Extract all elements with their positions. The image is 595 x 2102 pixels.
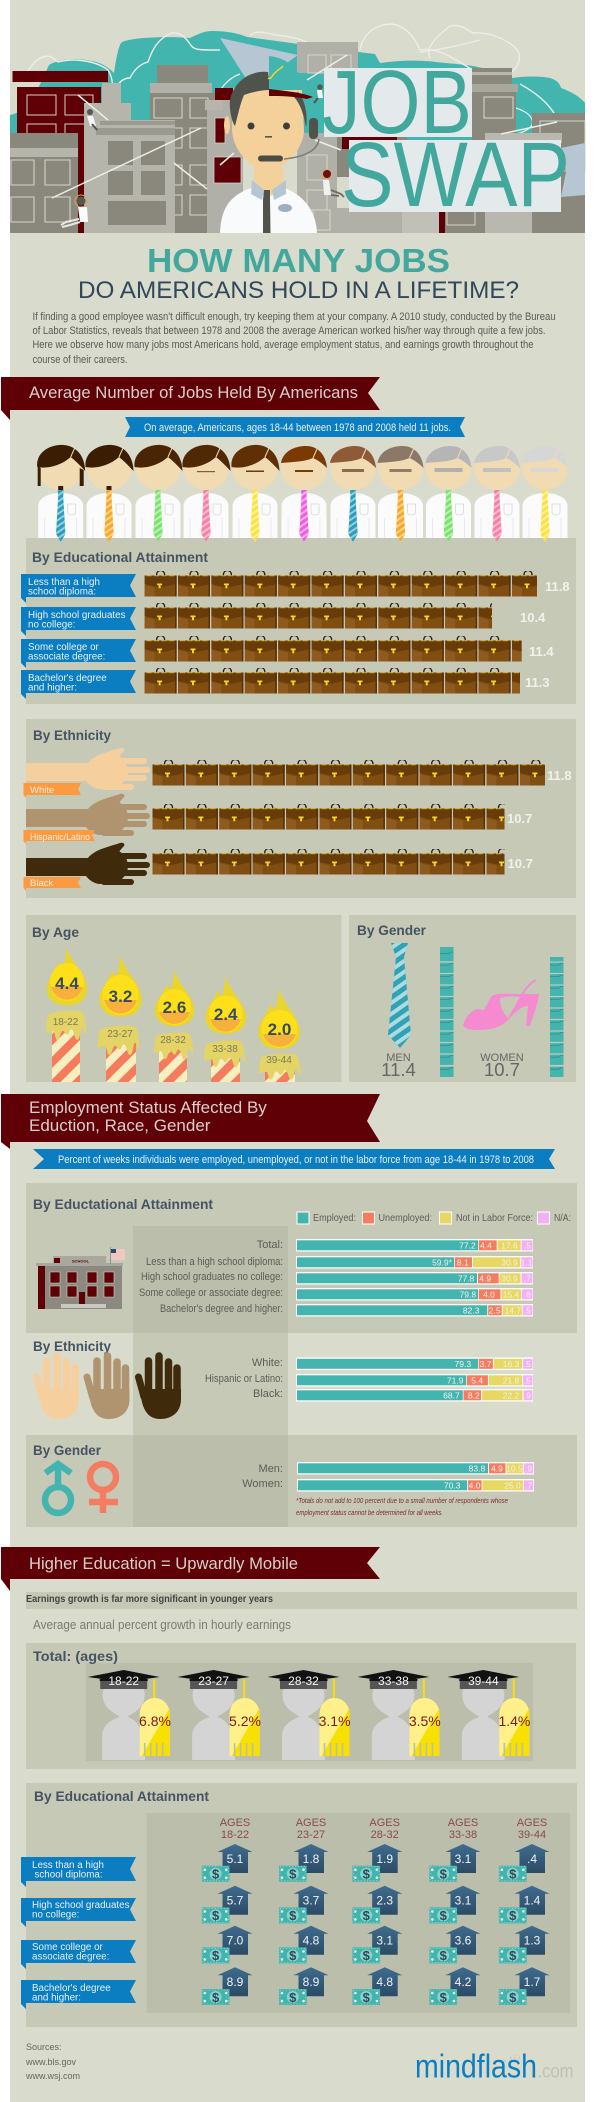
- graduate 39-44: 39-44: [468, 1674, 499, 1688]
- bar: women: 25.0: [504, 1480, 521, 1490]
- bar: total: 77.2: [459, 1240, 476, 1250]
- candle 28-32: 28-32: [160, 1035, 186, 1046]
- icon: raised black hand: [138, 1356, 181, 1419]
- bar: black: 68.7: [443, 1390, 460, 1400]
- panel: employment backgrounds: [26, 1183, 577, 1527]
- heading: By Educational Attainment: [32, 549, 208, 565]
- bars labels: ethnicity: Black:: [253, 1388, 283, 1400]
- earnings row: high school graduates: 1.4: [524, 1894, 541, 1908]
- bar: high school graduates: .7: [524, 1274, 531, 1284]
- bar: hispanic: .5: [524, 1376, 531, 1386]
- graduate 33-38: 3.5%: [409, 1713, 441, 1729]
- bar: women: 4.0: [469, 1480, 481, 1490]
- earnings row: less than high school: $: [509, 1866, 517, 1882]
- label: less than high school: Less than a high: [32, 1860, 104, 1871]
- earnings row: less than high school: [202, 1844, 550, 1882]
- graduate 33-38: 33-38: [378, 1674, 409, 1688]
- section banner: employment status: Eduction, Race, Gender: [29, 1116, 211, 1135]
- bars labels: education: High school graduates no college:: [141, 1271, 283, 1283]
- graduate 39-44: 1.4%: [498, 1713, 530, 1729]
- bar: total: .5: [524, 1240, 531, 1250]
- legend: Unemployed:: [378, 1212, 432, 1224]
- folders stack women: [550, 957, 564, 1077]
- subheading: Average annual percent growth in hourly earnings: [33, 1617, 291, 1632]
- footnote: *Totals do not add to 100 percent due to a small number of respondents whose: [296, 1498, 508, 1505]
- earnings row: bachelor's: $: [440, 1990, 448, 2005]
- bar: women: .7: [525, 1480, 532, 1490]
- bar: some college: [296, 1288, 533, 1300]
- earnings row: some college: $: [440, 1948, 448, 1963]
- bar: total: 4.4: [480, 1240, 492, 1250]
- label: some college: Some college or: [32, 1942, 104, 1953]
- label: high school graduates: High school graduates: [32, 1900, 130, 1911]
- bar: hispanic: 21.8: [503, 1376, 520, 1386]
- label: high school graduates: no college:: [32, 1910, 79, 1920]
- bar: white: 3.7: [480, 1359, 492, 1369]
- bar: total: 17.6: [501, 1240, 518, 1250]
- label: high school graduates: [21, 1898, 136, 1927]
- briefcases row 11.4: 11.4: [529, 644, 554, 659]
- briefcases black 10.7: 10.7: [508, 856, 533, 871]
- title: HOW MANY JOBS: [147, 242, 450, 279]
- earnings row: some college: 3.1: [376, 1934, 393, 1948]
- earnings row: some college: 3.6: [455, 1934, 472, 1948]
- bar: men: .9: [525, 1464, 532, 1474]
- earnings row: bachelor's: $: [212, 1990, 220, 2005]
- icon: women's shoe: [463, 980, 539, 1030]
- bar: less than high school: 59.9*: [432, 1258, 453, 1268]
- logo: mindflash: mindflash: [415, 2048, 537, 2084]
- bar: men: 10.5: [506, 1464, 523, 1474]
- candle 18-22: [46, 947, 87, 1082]
- ribbon: average statement: On average, Americans, ages 18-44 between 1978 and 2008 held 11 jobs.: [144, 422, 451, 434]
- candle 33-38: 33-38: [212, 1044, 238, 1055]
- earnings row: less than high school: $: [440, 1866, 448, 1882]
- bar: less than high school: 1.1: [521, 1258, 533, 1268]
- bar: high school graduates: 30.9: [501, 1274, 518, 1284]
- label: some college: associate degree:: [32, 1952, 109, 1962]
- icon: men's tie: [388, 943, 411, 1048]
- briefcases row 10.4: [145, 602, 546, 628]
- panel: earnings by educational attainment: [21, 1783, 577, 2027]
- panel: by age: [26, 915, 342, 1082]
- section banner: employment status: [1, 1094, 380, 1149]
- column headers: AGES: [220, 1817, 250, 1829]
- heading: By Ethnicity: [33, 727, 111, 743]
- briefcases row 10.4: 10.4: [520, 610, 546, 625]
- bar: high school graduates: 4.9: [479, 1274, 491, 1284]
- briefcases row 11.8: 11.8: [545, 579, 570, 594]
- earnings row: high school graduates: 3.7: [303, 1894, 320, 1908]
- column headers: AGES: [517, 1817, 547, 1829]
- bar: hispanic: 71.9: [447, 1376, 464, 1386]
- earnings row: bachelor's: 4.2: [455, 1975, 472, 1989]
- earnings row: less than high school: 3.1: [455, 1852, 472, 1866]
- women stat: WOMEN: [480, 1052, 524, 1064]
- legend: Employed:: [313, 1212, 356, 1224]
- bars labels: ethnicity: Hispanic or Latino:: [205, 1373, 283, 1385]
- bar: white: 79.3: [455, 1359, 471, 1369]
- label: bachelor's degree: and higher:: [28, 682, 77, 694]
- earnings row: high school graduates: 3.1: [455, 1894, 472, 1908]
- candle 18-22: 4.4: [55, 974, 79, 993]
- earnings row: less than high school: $: [289, 1866, 297, 1882]
- bar: bachelor's: 82.3: [463, 1306, 480, 1316]
- bar: less than high school: 30.9: [501, 1258, 518, 1268]
- column headers: 33-38: [449, 1829, 477, 1841]
- graduate 23-27: 23-27: [198, 1674, 229, 1688]
- candle 28-32: 2.6: [163, 998, 186, 1017]
- label: high school graduates: [21, 607, 136, 636]
- section banner: average number of jobs: Average Number of Jobs Held By Americans: [29, 384, 358, 402]
- panel: by gender: [349, 915, 576, 1082]
- candle 23-27: 23-27: [107, 1029, 133, 1040]
- icon: female symbol: [89, 1464, 118, 1513]
- bar: bachelor's: .5: [524, 1306, 531, 1316]
- label: some college: associate degree:: [28, 652, 105, 662]
- graduate 28-32: [268, 1670, 351, 1760]
- bars labels: gender: Men:: [259, 1463, 283, 1475]
- heading: ethnicity: By Ethnicity: [33, 1338, 111, 1354]
- column headers: 39-44: [518, 1829, 546, 1841]
- earnings row: bachelor's: $: [363, 1990, 371, 2005]
- bar: hispanic: [296, 1374, 533, 1386]
- briefcases row 11.8: [145, 570, 570, 596]
- icon: school building: SCHOOL: [72, 1258, 90, 1264]
- section banner: average number of jobs: [1, 377, 380, 420]
- graduate 18-22: 18-22: [108, 1674, 139, 1688]
- label: some college: [21, 1940, 136, 1969]
- label: less than high school: school diploma:: [34, 1870, 103, 1880]
- earnings row: less than high school: 1.8: [303, 1852, 320, 1866]
- icon: hispanic hand: [26, 794, 147, 835]
- bar: men: [297, 1462, 534, 1474]
- earnings row: high school graduates: $: [363, 1908, 371, 1923]
- bar: black: 8.2: [468, 1390, 480, 1400]
- bars labels: education: Bachelor's degree and higher:: [160, 1303, 283, 1315]
- candle 39-44: [258, 988, 301, 1082]
- briefcases hispanic 10.7: [152, 804, 552, 830]
- bar: bachelor's: [296, 1304, 533, 1316]
- intro paragraph: [32, 311, 556, 366]
- label: bachelor's degree: and higher:: [32, 1992, 81, 2004]
- graduate 33-38: [357, 1670, 441, 1760]
- label: bachelor's degree: Bachelor's degree: [28, 673, 107, 684]
- bar: men: 83.8: [469, 1464, 485, 1474]
- briefcases row 11.4: [145, 636, 554, 662]
- earnings row: some college: 7.0: [227, 1934, 244, 1948]
- label: bachelor's degree: [21, 670, 136, 699]
- bar: bachelor's: 2.5: [489, 1306, 501, 1316]
- bar: black: [296, 1389, 533, 1402]
- heading: By Gender: [357, 922, 427, 938]
- bar: men: 4.9: [491, 1464, 503, 1474]
- column headers: AGES: [369, 1817, 400, 1829]
- strip: earnings growth: Earnings growth is far more significant in younger years: [26, 1593, 273, 1605]
- candle 18-22: 18-22: [53, 1017, 79, 1028]
- label: black: Black: [30, 878, 53, 889]
- earnings row: high school graduates: $: [440, 1908, 448, 1923]
- bar: less than high school: 8.1: [457, 1258, 469, 1268]
- bars labels: education: [139, 1239, 283, 1315]
- candle 23-27: 3.2: [109, 987, 132, 1006]
- earnings row: bachelor's: 1.7: [524, 1975, 541, 1989]
- icon: school building: [36, 1247, 125, 1309]
- ribbon: employment statement: [33, 1149, 555, 1169]
- earnings row: some college: 1.3: [524, 1934, 541, 1948]
- column headers: 23-27: [297, 1829, 325, 1841]
- label: less than high school: school diploma:: [28, 586, 96, 598]
- panel: by educational attainment: [21, 538, 576, 704]
- sources: www.bls.gov: [25, 2057, 77, 2067]
- footnote: [296, 1498, 508, 1517]
- bar: some college: 79.8: [460, 1290, 476, 1300]
- bar: hispanic: 5.4: [471, 1376, 483, 1386]
- section banner: higher education: [1, 1547, 380, 1591]
- candle 28-32: [154, 970, 194, 1082]
- bars labels: ethnicity: White:: [252, 1357, 283, 1369]
- bar: some college: .8: [524, 1290, 531, 1300]
- section banner: employment status: Employment Status Affected By: [29, 1098, 267, 1117]
- sign: JOB: JOB: [322, 53, 472, 153]
- graduate 39-44: [447, 1670, 530, 1760]
- bar: white: 16.3: [503, 1359, 520, 1369]
- bars labels: ethnicity: [205, 1357, 283, 1400]
- icon: white hand: [26, 748, 147, 789]
- hanging workers: [61, 84, 344, 227]
- ribbon: average statement: [125, 417, 465, 437]
- bar: some college: 15.4: [503, 1290, 520, 1300]
- bars labels: education: Some college or associate degree:: [139, 1287, 283, 1299]
- label: bachelor's degree: [21, 1980, 136, 2009]
- sources: [25, 2042, 80, 2081]
- footnote: employment status cannot be determined for all weeks.: [296, 1510, 443, 1517]
- graduate 18-22: 6.8%: [139, 1713, 171, 1729]
- earnings row: high school graduates: $: [289, 1908, 297, 1923]
- bar: some college: 4.0: [483, 1290, 495, 1300]
- strip: earnings growth: [26, 1592, 577, 1609]
- bar: black: .9: [524, 1390, 531, 1400]
- earnings row: some college: $: [509, 1948, 517, 1963]
- women stat: 10.7: [484, 1059, 520, 1080]
- label: white: [24, 783, 81, 798]
- column headers: 28-32: [371, 1829, 399, 1841]
- people row: 11 jobs: [37, 445, 568, 542]
- legend: N/A:: [554, 1212, 571, 1224]
- candle 39-44: 2.0: [268, 1020, 291, 1039]
- earnings row: high school graduates: $: [509, 1908, 517, 1923]
- icon: black hand: [26, 843, 147, 884]
- icon: raised hispanic hand: [87, 1356, 130, 1419]
- earnings row: bachelor's: 8.9: [227, 1975, 244, 1989]
- bar: women: [297, 1479, 534, 1492]
- earnings row: some college: $: [289, 1948, 297, 1963]
- heading: Total: (ages): [33, 1648, 118, 1664]
- column headers: 18-22: [221, 1829, 249, 1841]
- candle 33-38: 2.4: [214, 1005, 238, 1024]
- men stat: MEN: [386, 1052, 411, 1064]
- earnings row: less than high school: 1.9: [376, 1852, 393, 1866]
- icon: male symbol: [45, 1464, 71, 1513]
- candle 39-44: 39-44: [266, 1055, 292, 1066]
- bar: black: 22.2: [503, 1390, 520, 1400]
- earnings row: high school graduates: 2.3: [376, 1894, 393, 1908]
- bars labels: gender: [242, 1463, 283, 1490]
- legend: [297, 1212, 571, 1224]
- earnings row: some college: $: [212, 1948, 220, 1963]
- earnings row: less than high school: .4: [527, 1852, 537, 1866]
- earnings row: less than high school: $: [212, 1866, 220, 1882]
- panel: total ages: [26, 1643, 576, 1769]
- label: less than high school: [21, 574, 136, 603]
- bar: white: .5: [524, 1359, 531, 1369]
- label: high school graduates: High school graduates: [28, 610, 126, 621]
- bar: high school graduates: [296, 1272, 533, 1284]
- graduate 28-32: 3.1%: [319, 1713, 351, 1729]
- graduate 18-22: [88, 1670, 171, 1760]
- bar: total: [296, 1239, 533, 1252]
- logo: mindflash: .com: [538, 2062, 574, 2082]
- icon: raised white hand: [36, 1356, 79, 1419]
- column headers: AGES: [296, 1817, 326, 1829]
- bar: less than high school: [296, 1256, 533, 1268]
- label: bachelor's degree: Bachelor's degree: [32, 1983, 111, 1994]
- earnings row: less than high school: $: [363, 1866, 371, 1882]
- bar: white: [296, 1358, 533, 1370]
- earnings row: some college: 4.8: [303, 1934, 320, 1948]
- briefcases white 11.8: [152, 760, 572, 786]
- heading: educational attainment: By Eductational Attainment: [33, 1196, 213, 1212]
- bars labels: education: Less than a high school diploma:: [146, 1256, 283, 1268]
- header illustration: [10, 24, 585, 233]
- graduate 23-27: 5.2%: [229, 1713, 261, 1729]
- bars labels: education: Total:: [257, 1239, 283, 1251]
- women stat: [480, 1052, 524, 1080]
- bar: bachelor's: 14.7: [505, 1306, 521, 1316]
- briefcases row 11.3: [145, 668, 550, 694]
- label: white: White: [30, 785, 54, 796]
- men stat: 11.4: [381, 1059, 416, 1080]
- heading: By Age: [32, 924, 79, 940]
- candle 33-38: [204, 976, 246, 1082]
- bar: women: 70.3: [444, 1480, 461, 1490]
- legend: Not in Labor Force:: [456, 1212, 533, 1224]
- label: some college: [21, 639, 136, 668]
- sources: www.wsj.com: [25, 2071, 80, 2081]
- earnings row: bachelor's: [202, 1967, 550, 2005]
- intro paragraph: course of their careers.: [32, 354, 128, 366]
- heading: By Educational Attainment: [34, 1788, 209, 1804]
- briefcases black 10.7: [152, 848, 552, 874]
- briefcases hispanic 10.7: 10.7: [507, 811, 532, 826]
- column headers: AGES: [448, 1817, 478, 1829]
- earnings row: bachelor's: $: [289, 1990, 297, 2005]
- earnings row: high school graduates: [202, 1886, 550, 1923]
- label: less than high school: Less than a high: [28, 577, 100, 588]
- candle 23-27: [98, 955, 142, 1082]
- folders stack men: [440, 947, 454, 1077]
- briefcases row 11.3: 11.3: [525, 675, 550, 690]
- sources: Sources:: [26, 2042, 62, 2052]
- earnings row: some college: $: [363, 1948, 371, 1963]
- label: high school graduates: no college:: [28, 620, 75, 630]
- column headers: [220, 1817, 547, 1841]
- section banner: higher education: Higher Education = Upwardly Mobile: [29, 1554, 298, 1573]
- panel: by ethnicity: [24, 719, 576, 898]
- label: hispanic: Hispanic/Latino: [30, 832, 90, 843]
- label: black: [24, 877, 81, 891]
- bar: high school graduates: 77.8: [458, 1274, 475, 1284]
- title: DO AMERICANS HOLD IN A LIFETIME?: [78, 277, 519, 304]
- briefcases white 11.8: 11.8: [547, 768, 572, 783]
- earnings row: bachelor's: $: [509, 1990, 517, 2005]
- label: some college: Some college or: [28, 642, 100, 653]
- label: less than high school: [21, 1857, 136, 1887]
- graduate 28-32: 28-32: [288, 1674, 319, 1688]
- character: call-centre agent: [220, 56, 319, 233]
- graduate 23-27: [178, 1670, 261, 1760]
- earnings row: high school graduates: $: [212, 1908, 220, 1923]
- earnings row: less than high school: 5.1: [227, 1852, 244, 1866]
- heading: gender: By Gender: [33, 1442, 102, 1458]
- earnings row: high school graduates: 5.7: [227, 1894, 244, 1908]
- earnings row: some college: [202, 1926, 550, 1963]
- title: [78, 242, 519, 304]
- bars labels: gender: Women:: [242, 1478, 283, 1490]
- earnings row: bachelor's: 4.8: [376, 1975, 393, 1989]
- earnings row: bachelor's: 8.9: [303, 1975, 320, 1989]
